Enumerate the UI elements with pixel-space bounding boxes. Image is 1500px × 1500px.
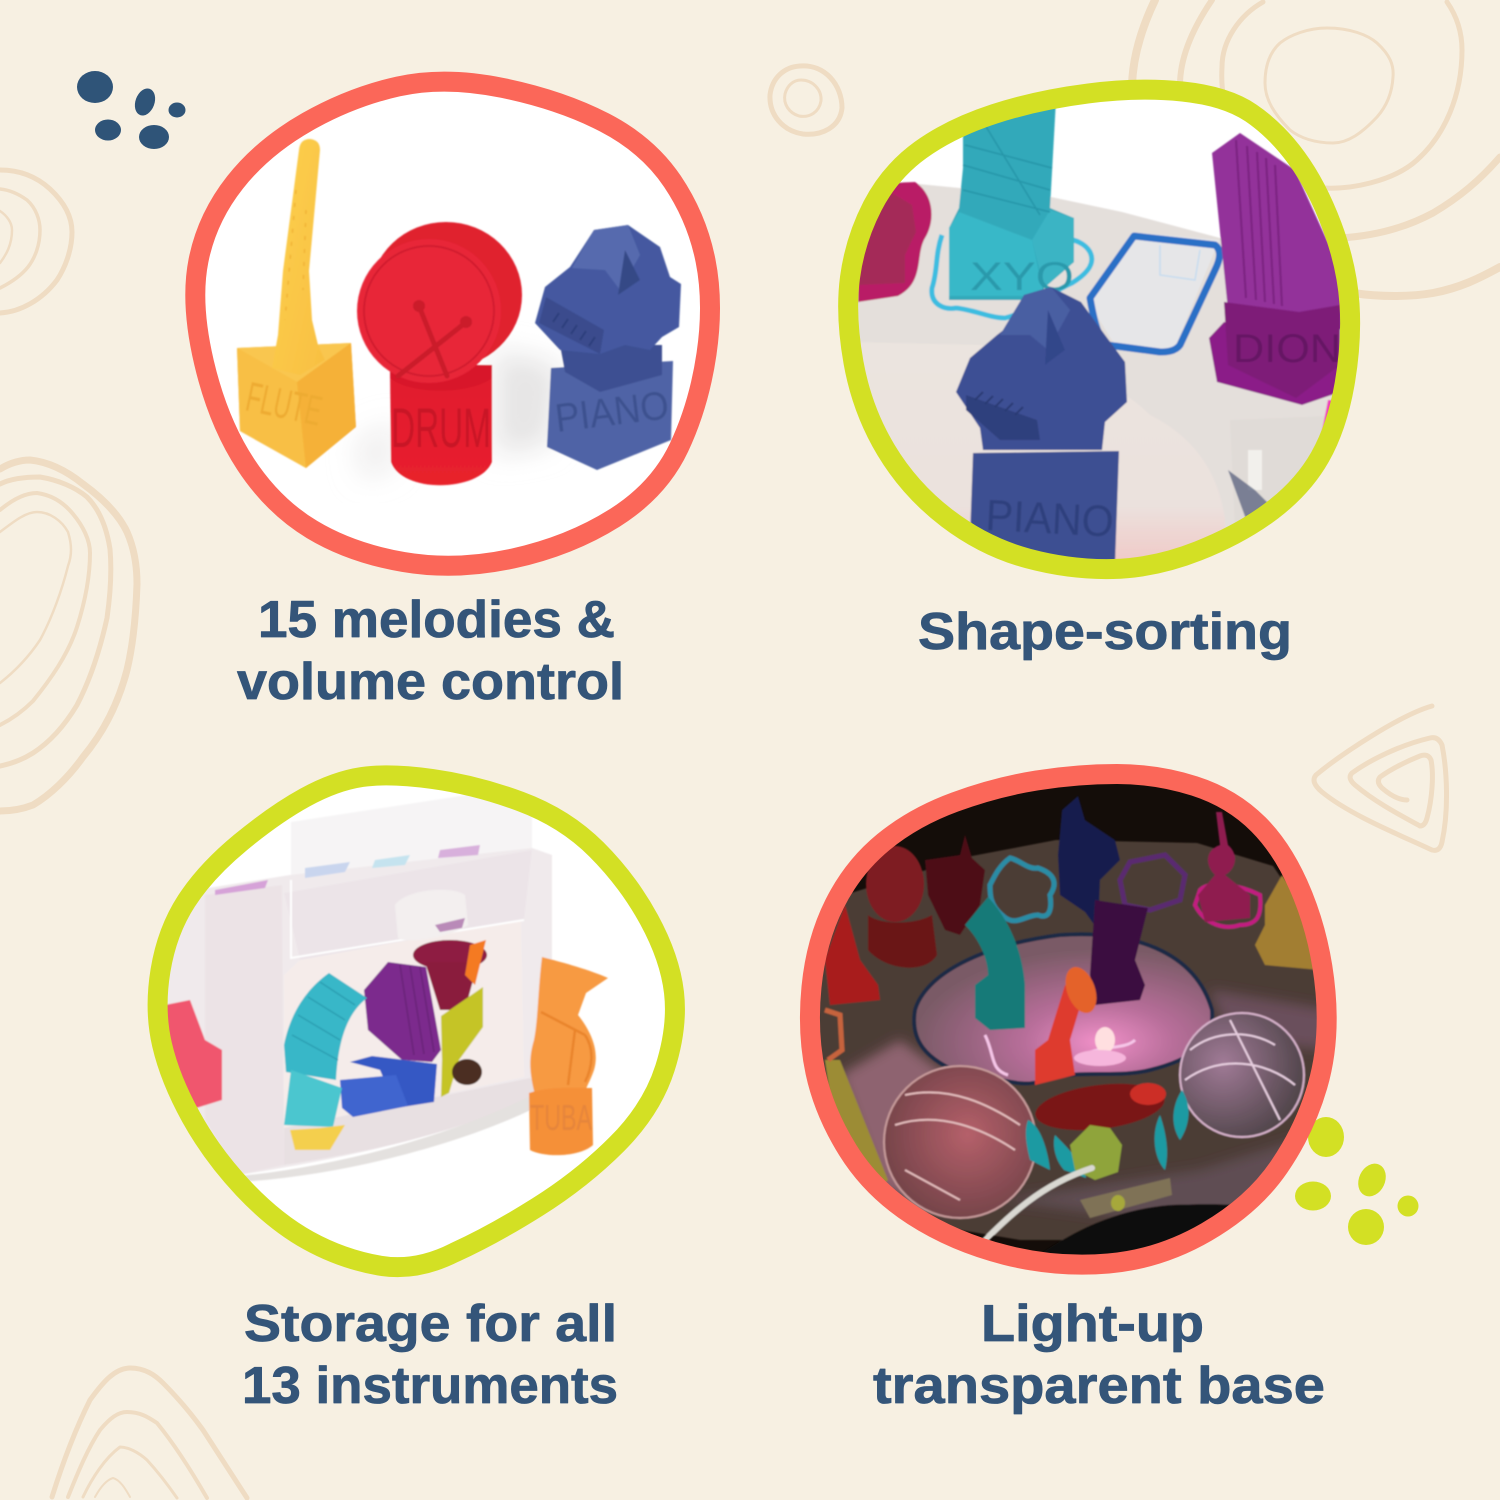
yellow-green strip bbox=[825, 1060, 888, 1195]
right sphere bbox=[1180, 1013, 1304, 1137]
stored toy: yellow piece bbox=[290, 1125, 345, 1150]
toy: purple accordion bbox=[1090, 900, 1148, 1005]
engraved label: TUBA bbox=[530, 1097, 592, 1138]
stored toy: brown piece bbox=[452, 1059, 482, 1085]
floor shadow bbox=[245, 1098, 530, 1182]
lit tray bbox=[810, 840, 1330, 1240]
shape ring: blue diamond bbox=[1086, 232, 1220, 352]
decoration: top right contour rings bbox=[1132, 0, 1500, 296]
toy: purple accordion bbox=[1208, 132, 1340, 431]
engraved label: XYO bbox=[970, 255, 1074, 299]
caption: light-up bbox=[873, 1295, 1325, 1415]
decoration: left small contour rings bbox=[0, 170, 72, 313]
caption: storage: 13 instruments bbox=[242, 1357, 618, 1415]
caption: light-up: transparent base bbox=[873, 1357, 1325, 1415]
decoration: small ring near top centre bbox=[770, 66, 842, 134]
caption: storage bbox=[242, 1295, 618, 1415]
clear storage box bbox=[150, 785, 552, 1180]
toy: red horn bbox=[1035, 963, 1102, 1085]
teal leaf pads bbox=[1026, 1090, 1189, 1178]
central glowing basin bbox=[914, 934, 1212, 1084]
toy: maroon figure bbox=[925, 835, 985, 935]
lower tray glow bbox=[840, 990, 1330, 1220]
toy: tuba bbox=[529, 957, 608, 1155]
dark hole bbox=[1025, 1204, 1300, 1280]
stored toy: yellow horn bbox=[441, 987, 483, 1097]
toy: piano bbox=[535, 225, 681, 470]
decoration: left large contour rings bbox=[0, 460, 137, 811]
toy: drum bbox=[357, 222, 522, 485]
caption: melodies: 15 melodies & bbox=[258, 591, 615, 649]
toy: navy piano bbox=[1058, 796, 1120, 930]
toy: magenta guitar bbox=[1195, 812, 1260, 927]
engraved label: DION bbox=[1233, 327, 1341, 371]
shape ring: blue star bbox=[932, 235, 1092, 318]
soft floor shadow bbox=[355, 350, 560, 480]
engraved label: FLUTE bbox=[242, 373, 326, 435]
panel: storage photo bbox=[150, 775, 675, 1267]
panel: melodies photo bbox=[195, 82, 710, 566]
toy: teal xylophone bbox=[965, 897, 1025, 1030]
dots: lime cluster bottom right bbox=[1295, 1117, 1418, 1245]
caption: light-up: Light-up bbox=[981, 1295, 1204, 1353]
stored toy: dark red bbox=[413, 940, 487, 1010]
peg detail bbox=[1248, 450, 1262, 490]
left sphere bbox=[884, 1066, 1036, 1218]
toy: left red piece bbox=[825, 905, 880, 1005]
stored toy: pink block bbox=[165, 1000, 222, 1110]
caption: shape-sorting: Shape-sorting bbox=[918, 603, 1292, 661]
dots: navy cluster top left bbox=[77, 71, 186, 149]
clear strip with button bbox=[1080, 1178, 1172, 1218]
shape ring: purple hexagon bbox=[1120, 855, 1185, 910]
toy: red drum stand bbox=[866, 846, 937, 968]
panel: shape-sorting photo bbox=[848, 90, 1350, 570]
caption: melodies bbox=[237, 591, 624, 711]
stored toy: purple accordion bbox=[364, 962, 441, 1062]
decoration: bottom left contour rings bbox=[52, 1368, 247, 1498]
toy: yellow piece right bbox=[1255, 875, 1320, 970]
stored toy: blue blocks bbox=[340, 1056, 437, 1117]
toy: piano bbox=[956, 287, 1127, 565]
shape ring: blue star bbox=[990, 858, 1054, 921]
red oval toy bbox=[1033, 1077, 1167, 1137]
clear tray bbox=[858, 182, 1340, 528]
stored toy: teal xylophone bbox=[284, 973, 367, 1127]
shape ring: magenta with toy bbox=[858, 182, 932, 302]
panel: light-up base photo bbox=[810, 774, 1330, 1280]
white cable bbox=[975, 1168, 1092, 1250]
engraved label: DRUM bbox=[391, 396, 491, 459]
green nut bbox=[1070, 1125, 1122, 1180]
caption: storage: Storage for all bbox=[244, 1295, 617, 1353]
engraved label: PIANO bbox=[984, 491, 1115, 547]
decoration: right triangle spiral bbox=[1314, 706, 1447, 850]
engraved label: PIANO bbox=[553, 383, 671, 441]
caption: melodies: volume control bbox=[237, 653, 624, 711]
toy: flute bbox=[237, 139, 356, 468]
toy: xylophone bbox=[949, 100, 1074, 300]
